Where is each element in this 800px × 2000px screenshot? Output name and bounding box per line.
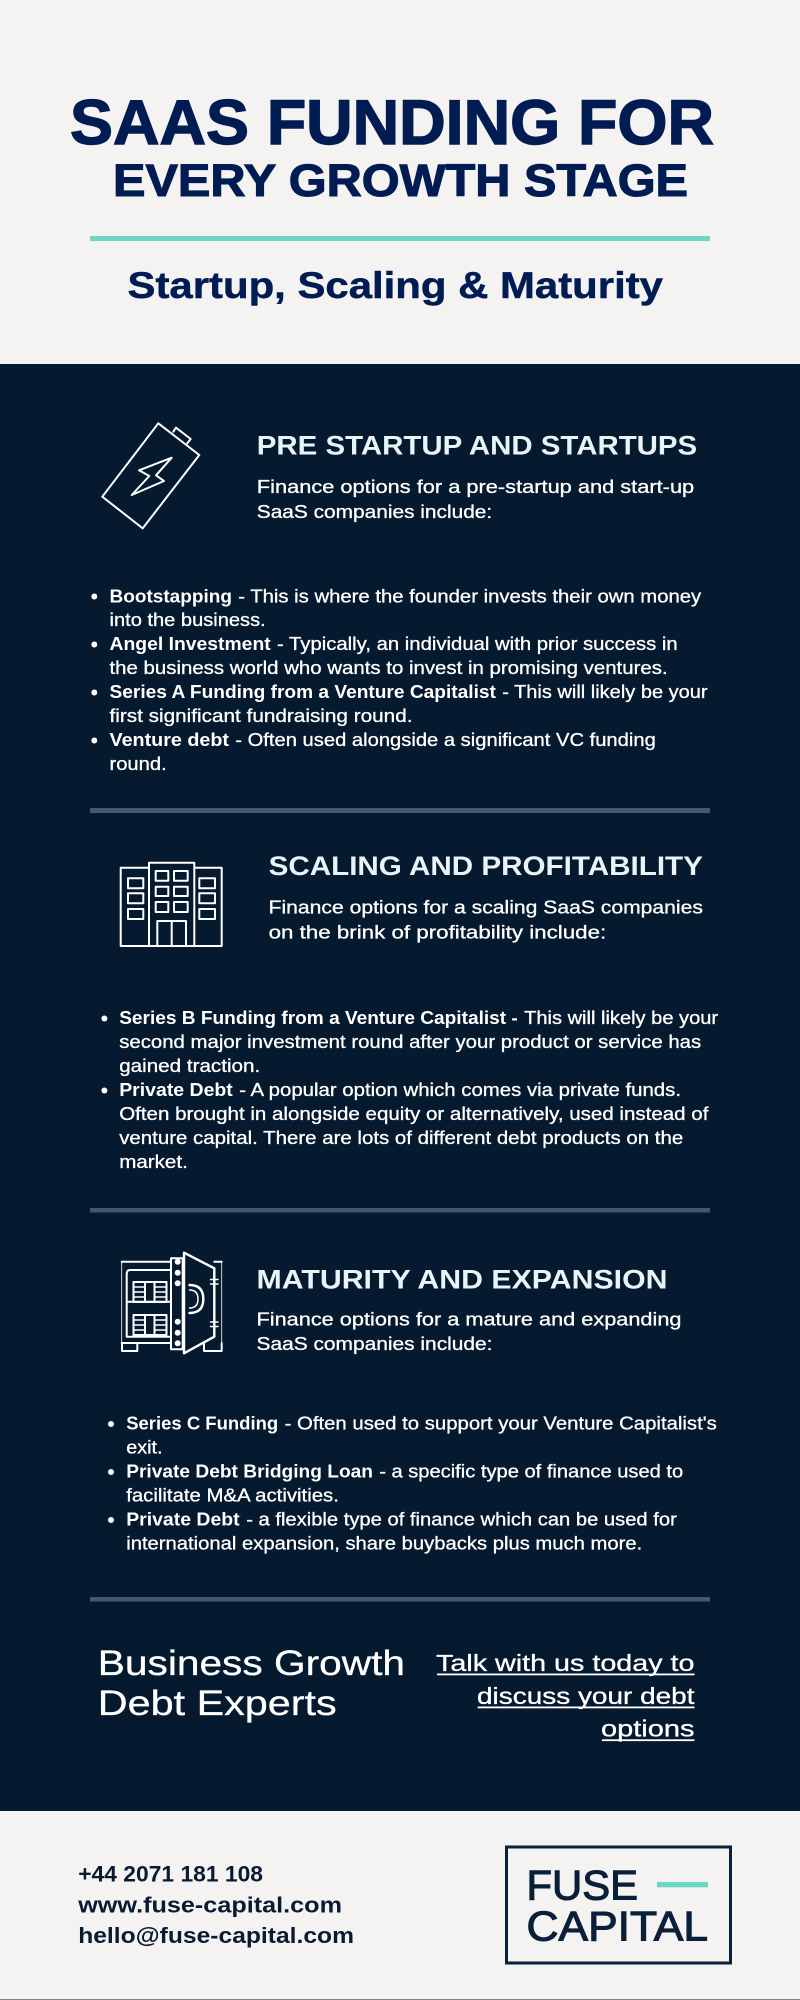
bullet list: - a flexible type of finance which can be used for	[246, 1509, 677, 1529]
bullet list: - a specific type of finance used to	[379, 1461, 683, 1481]
intro text	[257, 477, 694, 522]
contact details	[77, 1862, 354, 1948]
title line 2: EVERY GROWTH STAGE	[113, 155, 688, 206]
bullet list: international expansion, share buybacks plus much more.	[126, 1533, 642, 1553]
bullet list	[101, 1008, 718, 1172]
intro text	[269, 897, 703, 942]
bullet list: Series A Funding from a Venture Capitalist	[110, 682, 496, 702]
teal divider	[90, 236, 710, 241]
tagline: Business Growth	[98, 1644, 405, 1683]
panel: maturity and expansion	[108, 1253, 717, 1553]
intro text: on the brink of profitability include:	[269, 922, 606, 942]
title line 1: SAAS FUNDING FOR	[70, 88, 714, 158]
dark main panel	[0, 364, 800, 1811]
tagline: Debt Experts	[98, 1684, 337, 1723]
icon: office building	[121, 863, 222, 946]
panel: scaling and profitability	[101, 851, 718, 1172]
intro text	[256, 1309, 682, 1354]
heading: MATURITY AND EXPANSION	[256, 1264, 667, 1294]
call to action link: Talk with us today to	[436, 1650, 694, 1676]
heading: SCALING AND PROFITABILITY	[269, 851, 703, 881]
bullet list	[108, 1413, 717, 1553]
bullet list: facilitate M&A activities.	[126, 1485, 339, 1505]
logo: FUSE	[526, 1861, 638, 1908]
bullet list: round.	[110, 754, 167, 774]
bullet list: Angel Investment	[110, 634, 271, 654]
bullet list: - This will likely be your	[502, 682, 708, 702]
logo	[506, 1847, 730, 1963]
bullet list: market.	[119, 1152, 188, 1172]
bullet list: - A popular option which comes via private funds.	[239, 1080, 681, 1100]
bullet list: - Often used to support your Venture Capitalist's	[285, 1413, 717, 1433]
logo: CAPITAL	[526, 1903, 708, 1950]
icon: battery	[102, 423, 199, 528]
bullet list: first significant fundraising round.	[110, 706, 413, 726]
bullet list: Series C Funding	[126, 1413, 278, 1433]
intro text: Finance options for a pre-startup and start-up	[257, 477, 694, 497]
contact details: hello@fuse-capital.com	[78, 1923, 354, 1948]
intro text: Finance options for a scaling SaaS companies	[269, 897, 703, 917]
bullet list: Private Debt	[119, 1080, 233, 1100]
bullet list: Private Debt	[126, 1509, 240, 1529]
bullet list: venture capital. There are lots of different debt products on the	[119, 1128, 683, 1148]
intro text: SaaS companies include:	[256, 1334, 492, 1354]
icon: open safe	[122, 1253, 222, 1353]
bullet list: This will likely be your	[524, 1008, 718, 1028]
panel: pre startup and startups	[91, 423, 708, 774]
bullet list: into the business.	[110, 610, 266, 630]
bullet list	[91, 586, 708, 774]
call to action link	[436, 1650, 695, 1742]
header panel	[0, 0, 800, 364]
bullet list: - Typically, an individual with prior success in	[277, 634, 678, 654]
call to action link: options	[601, 1716, 694, 1742]
call to action link: discuss your debt	[477, 1683, 695, 1709]
bullet list: - This is where the founder invests their own money	[238, 586, 701, 606]
bullet list: Private Debt Bridging Loan	[126, 1461, 373, 1481]
heading: PRE STARTUP AND STARTUPS	[257, 431, 697, 461]
subtitle: Startup, Scaling & Maturity	[128, 265, 663, 306]
bullet list: Venture debt	[110, 730, 229, 750]
bullet list: Series B Funding from a Venture Capitalist -	[119, 1008, 518, 1028]
tagline	[98, 1644, 405, 1723]
intro text: SaaS companies include:	[257, 502, 492, 522]
bullet list: the business world who wants to invest in promising ventures.	[110, 658, 668, 678]
bullet list: - Often used alongside a significant VC funding	[235, 730, 656, 750]
contact details: +44 2071 181 108	[78, 1862, 263, 1887]
footer panel	[0, 1811, 800, 2000]
bullet list: second major investment round after your product or service has	[119, 1032, 701, 1052]
bullet list: gained traction.	[119, 1056, 260, 1076]
bullet list: exit.	[126, 1437, 163, 1457]
bullet list: Bootstapping	[110, 586, 232, 606]
bullet list: Often brought in alongside equity or alternatively, used instead of	[119, 1104, 710, 1124]
intro text: Finance options for a mature and expanding	[256, 1309, 682, 1329]
contact details: www.fuse-capital.com	[77, 1893, 342, 1918]
